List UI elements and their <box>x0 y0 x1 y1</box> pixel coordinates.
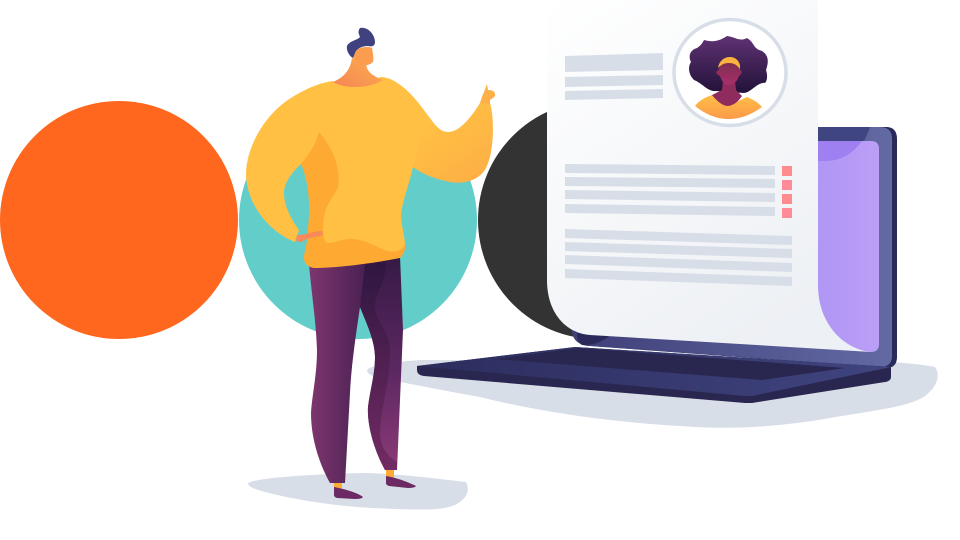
avatar <box>674 20 786 126</box>
avatar hair <box>689 36 768 93</box>
raised hand <box>480 84 495 104</box>
shoes <box>334 487 363 499</box>
pink markers <box>782 166 792 218</box>
person <box>246 28 495 499</box>
page sheet <box>547 0 872 352</box>
neck and collar <box>333 58 383 87</box>
document page <box>547 0 872 352</box>
middle text bars <box>565 164 775 216</box>
base top surface <box>417 347 891 396</box>
avatar headband <box>718 57 740 69</box>
avatar neck <box>712 80 742 106</box>
screen shade <box>810 141 862 161</box>
header text bars <box>565 53 663 100</box>
laptop <box>417 127 897 403</box>
lid hinge shade <box>577 333 612 345</box>
laptop screen <box>810 141 879 352</box>
right leg shade <box>360 262 397 470</box>
lower text bars <box>565 229 792 286</box>
lid top band <box>800 127 870 161</box>
raised arm <box>385 78 493 183</box>
laptop lid <box>570 127 897 368</box>
hand on hip <box>296 231 323 242</box>
avatar shirt <box>695 95 762 119</box>
sweater body and left arm <box>246 77 418 252</box>
hair <box>347 28 375 58</box>
orange circle <box>0 101 238 339</box>
dark circle <box>478 101 716 339</box>
avatar ring <box>674 20 786 126</box>
left leg <box>309 262 365 483</box>
sweater shade and hem <box>301 132 405 268</box>
right leg <box>360 256 403 470</box>
teal circle <box>239 101 477 339</box>
laptop base <box>417 347 891 403</box>
face <box>353 47 373 65</box>
laptop shadow <box>367 360 938 428</box>
keyboard <box>495 348 845 380</box>
avatar face <box>716 63 742 85</box>
person shadow <box>248 473 468 510</box>
socks <box>334 469 394 490</box>
